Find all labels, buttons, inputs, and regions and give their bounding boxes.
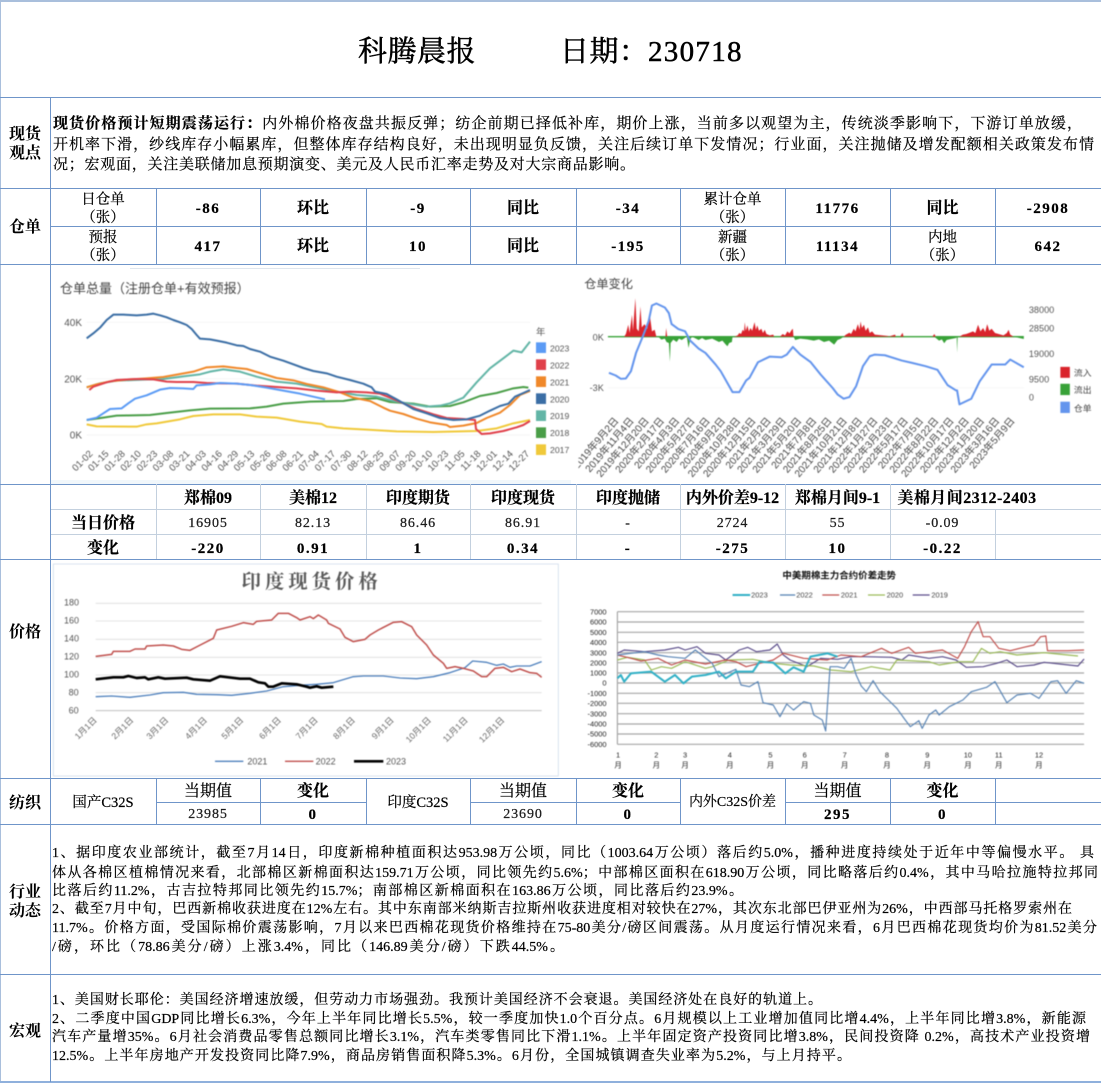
group: domestic C32S: 当期值: [184, 783, 232, 800]
row: forecast receipts: 预报: [88, 230, 118, 246]
text block: macro news: 1、美国财长耶伦：美国经济增速放缓，但劳动力市场强劲。我预计美国经济不会衰退。美国经济处在良好的轨道上。: [52, 993, 822, 1008]
row: current price: 当日价格: [71, 514, 135, 532]
row: daily receipts: -2908: [1027, 201, 1069, 217]
row: forecast receipts: （张）: [711, 248, 754, 264]
chart: total warehouse receipts by year: 04-16: [200, 449, 225, 474]
table: yarn: [72, 782, 958, 823]
chart: China-US futures spread: 月: [924, 760, 931, 769]
chart: China-US futures spread: 6000: [590, 618, 607, 627]
group: India C32S: 23690: [503, 807, 543, 822]
row: current price: 16905: [188, 516, 228, 530]
chart: China-US futures spread: 月: [726, 760, 734, 769]
chart: total warehouse receipts by year: 04-03: [184, 449, 209, 474]
chart: warehouse receipt changes: 2021年8月25日: [780, 415, 835, 475]
chart: warehouse receipt changes: 2019年12月20日: [593, 415, 652, 480]
chart: China-US futures spread: 2000: [590, 658, 607, 667]
chart: total warehouse receipts by year: 05-13: [232, 449, 257, 474]
chart: warehouse receipt changes: 2021年2月2日: [722, 415, 774, 471]
row: forecast receipts: 内地: [928, 230, 957, 246]
row: daily receipts: 累计仓单: [704, 192, 762, 208]
row: price headers: [184, 489, 1037, 506]
group: domestic C32S: [72, 782, 329, 823]
chart: total warehouse receipts by year: 11-18: [459, 449, 483, 473]
chart: warehouse receipt changes: 2022年12月2日: [917, 415, 972, 475]
chart: total warehouse receipts by year: 11-05: [443, 449, 467, 473]
chart: India spot price: 9月1日: [370, 715, 396, 741]
chart: China-US futures spread: 月: [1035, 760, 1043, 769]
group: India C32S: 变化: [612, 783, 644, 800]
group: C32S spread: 0: [938, 807, 947, 823]
chart: total warehouse receipts by year: 08-25: [361, 449, 386, 474]
chart: total warehouse receipts by year: 07-17: [313, 449, 338, 474]
row: price headers: 内外价差9-12: [686, 490, 779, 506]
chart: warehouse receipt changes: 2019年9月2日: [570, 415, 621, 471]
row: current price: 55: [830, 516, 845, 530]
chart: total warehouse receipts by year: 12-14: [491, 448, 516, 474]
group: India C32S: 当期值: [499, 783, 547, 800]
chart: warehouse receipt changes: 仓单: [1074, 402, 1092, 413]
text block: spot price view: [53, 115, 1094, 173]
chart: China-US futures spread: -4000: [588, 720, 607, 729]
section label: 行业动态: 动态: [9, 903, 41, 920]
row: current price: 82.13: [295, 516, 331, 530]
row: daily receipts: 日仓单: [81, 192, 125, 208]
row: current price: -0.09: [926, 516, 959, 530]
chart: China-US futures spread: 2019: [931, 591, 948, 600]
chart: total warehouse receipts by year: 08-12: [345, 449, 370, 474]
section label: 仓单: 仓单: [9, 219, 41, 236]
row: price headers: 印度现货: [491, 490, 555, 506]
section label: 现货观点: [9, 125, 41, 162]
chart: total warehouse receipts by year: 05-26: [248, 449, 273, 474]
chart: China-US futures spread: 月: [614, 760, 622, 769]
chart: China-US futures spread: 10: [964, 750, 972, 759]
text block: spot price view: 开机率下滑，纱线库存小幅累库，但整体库存结构良好，未出现明显负反馈，关注后续订单下发情况；行业面，关注抛储及增发配额相关政策发布情: [53, 137, 1094, 153]
chart: warehouse receipt changes: 2019年11月4日: [582, 415, 637, 475]
chart: China-US futures spread: 月: [841, 760, 848, 769]
chart: warehouse receipt changes: 2021年10月21日: [791, 415, 850, 480]
section label: 现货观点: 现货: [9, 126, 41, 143]
chart: India spot price: [52, 563, 560, 777]
chart: China-US futures spread: 月: [995, 760, 1002, 769]
text block: macro news: 汽车产量增35%。6月社会消费品零售总额同比增长3.1%，汽车类零售同比下滑1.1%。上半年固定资产投资同比增3.8%，民间投资降 0.2%，高技术产业投资增: [52, 1030, 1090, 1045]
row: forecast receipts: 11134: [816, 239, 859, 255]
row: forecast receipts: -195: [611, 239, 645, 255]
chart: China-US futures spread: 11: [995, 750, 1003, 759]
title: 日期：: [560, 36, 649, 68]
chart: India spot price: 180: [64, 598, 79, 608]
chart: total warehouse receipts by year: 40K: [64, 318, 82, 329]
group: C32S spread: [689, 782, 958, 823]
text block: macro news: 12.5%。上半年房地产开发投资同比降7.9%，商品房销售面积降5.3%。6月份，全国城镇调查失业率为5.2%，与上月持平。: [52, 1049, 851, 1064]
chart: warehouse receipt changes: 0: [1029, 392, 1034, 402]
chart: total warehouse receipts by year: 20K: [64, 374, 82, 385]
chart: India spot price: 5月1日: [219, 715, 245, 741]
row: forecast receipts: 417: [194, 239, 222, 255]
chart: India spot price: 8月1日: [331, 715, 357, 741]
chart: total warehouse receipts by year: 年: [536, 326, 545, 337]
row: daily receipts: 环比: [297, 200, 329, 217]
chart: total warehouse receipts by year: 2019: [550, 411, 569, 421]
chart: India spot price: 3月1日: [144, 715, 170, 741]
chart: India spot price: 印度现货价格: [242, 570, 382, 593]
chart: China-US futures spread: 5: [768, 750, 773, 759]
chart: India spot price: 4月1日: [183, 715, 209, 741]
chart: total warehouse receipts by year: 2023: [550, 344, 569, 354]
row: price change: [87, 539, 962, 556]
chart: China-US futures spread: 中美期棉主力合约价差走势: [782, 570, 897, 581]
group: C32S spread: 295: [824, 807, 851, 823]
section label: 现货观点: 观点: [9, 145, 41, 162]
chart: India spot price: 120: [64, 652, 79, 662]
chart: total warehouse receipts by year: 02-23: [135, 449, 160, 474]
row: daily receipts: 同比: [507, 200, 539, 217]
chart: warehouse receipt changes: 2020年5月27日: [643, 415, 698, 475]
chart: warehouse receipt changes: 19000: [1029, 349, 1054, 359]
text block: industry news: 2、截至7月中旬，巴西新棉收获进度在12%左右。其中东南部米纳斯吉拉斯州收获进度相对较快在27%，其次东北部巴伊亚州为26%，中西部马托格罗索州在: [52, 902, 1072, 917]
row: price headers: 郑棉月间9-1: [795, 490, 880, 506]
chart: warehouse receipt changes: 28500: [1029, 324, 1054, 334]
row: price change: -0.22: [923, 540, 962, 556]
row: price headers: 郑棉09: [184, 490, 232, 506]
chart: total warehouse receipts by year: 0K: [70, 431, 82, 442]
chart: India spot price: 2月1日: [109, 715, 135, 741]
chart: warehouse receipt changes: 2023年1月20日: [932, 415, 987, 475]
chart: total warehouse receipts by year: 07-30: [329, 449, 354, 474]
row: daily receipts: -9: [410, 201, 426, 217]
row: price headers: 美棉月间2312-2403: [897, 490, 1037, 506]
row: current price: 86.46: [400, 516, 436, 530]
chart: India spot price: 1月1日: [73, 715, 99, 741]
text block: macro news: [52, 992, 1090, 1064]
group: India C32S: 0: [624, 807, 632, 823]
row: price headers: 印度期货: [386, 490, 450, 506]
chart: total warehouse receipts by year: [60, 281, 570, 474]
chart: warehouse receipt changes: 2020年10月28日: [685, 415, 743, 480]
chart: total warehouse receipts by year: 2018: [550, 428, 569, 438]
chart: China-US futures spread: 2023: [751, 591, 768, 600]
row: price change: 0.34: [507, 540, 539, 556]
chart: India spot price: 2021: [247, 756, 267, 766]
row: price change: 变化: [87, 540, 119, 556]
chart: warehouse receipt changes: 0K: [593, 332, 604, 342]
chart: China-US futures spread: -6000: [588, 740, 607, 749]
chart: warehouse receipt changes: 2022年7月5日: [875, 415, 926, 471]
chart: China-US futures spread: 0: [602, 679, 607, 688]
section label: 宏观: 宏观: [9, 1023, 41, 1040]
chart: India spot price: 11月1日: [441, 715, 470, 744]
chart: China-US futures spread: 7: [843, 750, 847, 759]
group: domestic C32S: 变化: [297, 783, 329, 800]
chart: total warehouse receipts by year: 12-01: [475, 449, 500, 474]
row: daily receipts: 同比: [926, 200, 958, 217]
group: C32S spread: 内外C32S价差: [689, 795, 776, 810]
row: price headers: 美棉12: [289, 490, 337, 506]
chart: total warehouse receipts by year: 10-10: [410, 449, 435, 474]
title: [358, 36, 743, 68]
chart: total warehouse receipts by year: 02-10: [119, 449, 144, 474]
row: forecast receipts: 新疆: [718, 230, 747, 246]
chart: warehouse receipt changes: 流入: [1074, 367, 1092, 378]
chart: warehouse receipt changes: 9500: [1029, 375, 1049, 384]
row: price change: 10: [828, 540, 846, 556]
chart: India spot price: 60: [69, 705, 79, 715]
title: 230718: [648, 36, 743, 68]
chart: India spot price: 12月1日: [477, 715, 506, 745]
section label: 价格: 价格: [9, 624, 41, 641]
chart: warehouse receipt changes: 2022年5月17日: [856, 415, 911, 475]
section label: 纺织: 纺织: [9, 795, 41, 812]
chart: total warehouse receipts by year: 09-20: [394, 449, 419, 474]
chart: total warehouse receipts by year: 01-02: [70, 449, 95, 474]
chart: total warehouse receipts by year: 07-04: [297, 448, 322, 474]
table: warehouse receipts: [81, 191, 1069, 264]
row: forecast receipts: 环比: [297, 238, 329, 255]
chart: total warehouse receipts by year: 01-28: [103, 449, 128, 474]
row: current price: 86.91: [505, 516, 541, 530]
chart: China-US futures spread: 4000: [590, 638, 607, 647]
chart: total warehouse receipts by year: 仓单总量（注册仓单+有效预报）: [60, 281, 250, 296]
chart: warehouse receipt changes: 2022年1月27日: [825, 415, 880, 475]
chart: India spot price: 80: [69, 687, 79, 697]
chart: warehouse receipt changes: 2020年4月3日: [631, 415, 682, 471]
chart: total warehouse receipts by year: 01-15: [86, 449, 111, 474]
text block: industry news: 比落后约11.2%，古吉拉特邦同比领先约15.7%；南部棉区新棉面积在163.86万公顷，同比落后约23.9%。: [52, 884, 743, 899]
chart: warehouse receipt changes: 仓单变化: [584, 276, 633, 291]
chart: China-US futures spread: 月: [883, 760, 891, 769]
row: forecast receipts: 同比: [507, 238, 539, 255]
chart: China-US futures spread: 1: [616, 750, 620, 759]
chart: India spot price: 2022: [316, 756, 336, 766]
row: daily receipts: [81, 191, 1069, 226]
chart: warehouse receipt changes: 2021年5月20日: [749, 415, 804, 475]
chart: China-US futures spread: 6: [803, 750, 807, 759]
chart: warehouse receipt changes: 流出: [1074, 384, 1092, 395]
chart: warehouse receipt changes: 2021年3月29日: [734, 415, 789, 475]
chart: total warehouse receipts by year: 03-21: [167, 449, 192, 474]
chart: China-US futures spread: 8: [885, 750, 889, 759]
chart: total warehouse receipts by year: 2021: [550, 377, 569, 387]
chart: India spot price: 7月1日: [294, 715, 320, 741]
chart: total warehouse receipts by year: 09-07: [378, 449, 403, 474]
row: price change: -220: [191, 540, 225, 556]
text block: industry news: 1、据印度农业部统计，截至7月14日，印度新棉种植面积达953.98万公顷，同比（1003.64万公顷）落后约5.0%，播种进度持续处于近年中等偏慢水平。 具: [52, 846, 1094, 861]
row: forecast receipts: （张）: [921, 248, 964, 264]
row: price change: 0.91: [297, 540, 329, 556]
chart: China-US futures spread: 2020: [887, 591, 903, 600]
group: India C32S: 印度C32S: [387, 795, 449, 811]
chart: India spot price: 160: [64, 616, 79, 626]
text block: industry news: 体从各棉区植棉情况来看，北部棉区新棉面积达159.71万公顷，同比领先约5.6%；中部棉区面积在618.90万公顷，同比略落后约0.4%，其中马哈拉施特拉邦同: [52, 866, 1098, 881]
chart: warehouse receipt changes: 2023年3月16日: [947, 415, 1002, 475]
text block: industry news: [52, 844, 1098, 955]
chart: total warehouse receipts by year: 10-23: [426, 449, 451, 474]
chart: warehouse receipt changes: 2021年7月8日: [768, 415, 820, 471]
table: prices: [71, 489, 1037, 556]
chart: China-US futures spread: 9: [925, 750, 929, 759]
chart: total warehouse receipts by year: 2017: [550, 445, 569, 455]
row: price change: 1: [414, 540, 422, 556]
chart: warehouse receipt changes: 2020年12月15日: [700, 415, 759, 480]
chart: China-US futures spread: 4: [728, 750, 732, 759]
chart: India spot price: 140: [64, 634, 79, 644]
chart: warehouse receipt changes: 2023年5月9日: [966, 415, 1018, 471]
row: forecast receipts: （张）: [81, 248, 125, 264]
chart: China-US futures spread: 12: [1035, 750, 1043, 759]
text block: industry news: 11.7%。价格方面，受国际棉价震荡影响，7月以来巴西棉花现货价格维持在75-80美分/磅区间震荡。从月度运行情况来看，6月巴西棉花现货均价为81.52美分: [52, 921, 1097, 936]
chart: China-US futures spread: 2022: [796, 591, 813, 600]
row: daily receipts: 11776: [815, 201, 860, 217]
chart: warehouse receipt changes: 2021年12月8日: [810, 415, 865, 475]
chart: China-US futures spread: 2021: [841, 591, 857, 600]
row: price headers: 印度抛储: [596, 490, 660, 506]
chart: India spot price: 6月1日: [257, 715, 283, 741]
row: daily receipts: -34: [616, 201, 640, 217]
group: domestic C32S: 23985: [188, 807, 228, 822]
group: India C32S: [387, 782, 644, 823]
chart: China-US futures spread: -1000: [588, 689, 607, 698]
chart: warehouse receipt changes: 2022年10月17日: [898, 415, 957, 480]
chart: total warehouse receipts by year: 2020: [550, 394, 569, 404]
chart: China-US futures spread: 月: [801, 760, 808, 769]
row: forecast receipts: [81, 228, 1062, 264]
chart: China-US futures spread: [587, 570, 1085, 770]
chart: total warehouse receipts by year: 2022: [550, 360, 569, 370]
chart: China-US futures spread: 5000: [590, 628, 607, 637]
chart: total warehouse receipts by year: 06-21: [281, 449, 306, 474]
chart: China-US futures spread: 月: [681, 760, 689, 769]
chart: India spot price: 100: [64, 670, 79, 680]
row: forecast receipts: 642: [1034, 239, 1062, 255]
chart: China-US futures spread: -2000: [588, 699, 607, 708]
chart: China-US futures spread: -3000: [588, 709, 607, 718]
row: forecast receipts: 10: [409, 239, 427, 255]
chart: India spot price: 10月1日: [404, 715, 433, 745]
chart: warehouse receipt changes: 38000: [1029, 305, 1054, 315]
chart: warehouse receipt changes: [578, 276, 1092, 478]
chart: India spot price: 2023: [386, 756, 406, 766]
row: current price: -: [625, 516, 631, 530]
row: daily receipts: -86: [196, 201, 220, 217]
chart: warehouse receipt changes: 2020年9月2日: [677, 415, 728, 471]
text block: macro news: 2、二季度中国GDP同比增长6.3%，今年上半年同比增长5.5%，较一季度加快1.0个百分点。6月规模以上工业增加值同比增4.4%，上半年同比增3.8%，新能源: [52, 1012, 1086, 1027]
chart: China-US futures spread: 2: [654, 750, 658, 759]
chart: warehouse receipt changes: -3K: [590, 383, 604, 393]
row: current price: 2724: [717, 516, 748, 530]
text block: spot price view: 况；宏观面，关注美联储加息预期演变、美元及人民币汇率走势及对大宗商品影响。: [53, 157, 635, 173]
row: current price: [71, 514, 959, 532]
chart: total warehouse receipts by year: 12-27: [507, 449, 532, 474]
chart: total warehouse receipts by year: 04-29: [216, 449, 241, 474]
chart: China-US futures spread: -5000: [588, 730, 607, 739]
group: C32S spread: 变化: [926, 783, 958, 800]
section label: 行业动态: 行业: [9, 884, 41, 901]
chart: China-US futures spread: 3000: [590, 648, 607, 657]
chart: warehouse receipt changes: 2022年8月22日: [886, 415, 941, 475]
text block: industry news: /磅，环比（78.86美分/磅）上涨3.4%，同比（146.89美分/磅）下跌44.5%。: [52, 940, 564, 955]
group: domestic C32S: 0: [308, 807, 318, 823]
row: price change: -: [625, 540, 631, 556]
text block: spot price view: 现货价格预计短期震荡运行：内外棉价格夜盘共振反弹；纺企前期已择低补库，期价上涨，当前多以观望为主，传统淡季影响下，下游订单放缓，: [53, 116, 1082, 132]
row: daily receipts: （张）: [711, 210, 754, 226]
chart: China-US futures spread: 1000: [590, 669, 607, 678]
chart: warehouse receipt changes: 2020年7月16日: [658, 415, 713, 475]
chart: China-US futures spread: 月: [964, 760, 972, 769]
chart: China-US futures spread: 3: [683, 750, 687, 759]
title: 科腾晨报: [358, 36, 476, 68]
chart: total warehouse receipts by year: 06-08: [264, 449, 289, 474]
chart: total warehouse receipts by year: 03-08: [151, 449, 176, 474]
chart: China-US futures spread: 月: [653, 760, 660, 769]
chart: warehouse receipt changes: 2022年3月23日: [841, 415, 896, 475]
chart: China-US futures spread: 7000: [590, 607, 607, 616]
group: C32S spread: 当期值: [813, 783, 862, 800]
section label: 行业动态: [9, 883, 41, 920]
chart: warehouse receipt changes: 2020年2月17日: [612, 415, 667, 475]
row: daily receipts: （张）: [81, 210, 125, 226]
group: domestic C32S: 国产C32S: [72, 795, 134, 811]
row: price change: -275: [716, 540, 749, 556]
chart: China-US futures spread: 月: [767, 760, 774, 769]
